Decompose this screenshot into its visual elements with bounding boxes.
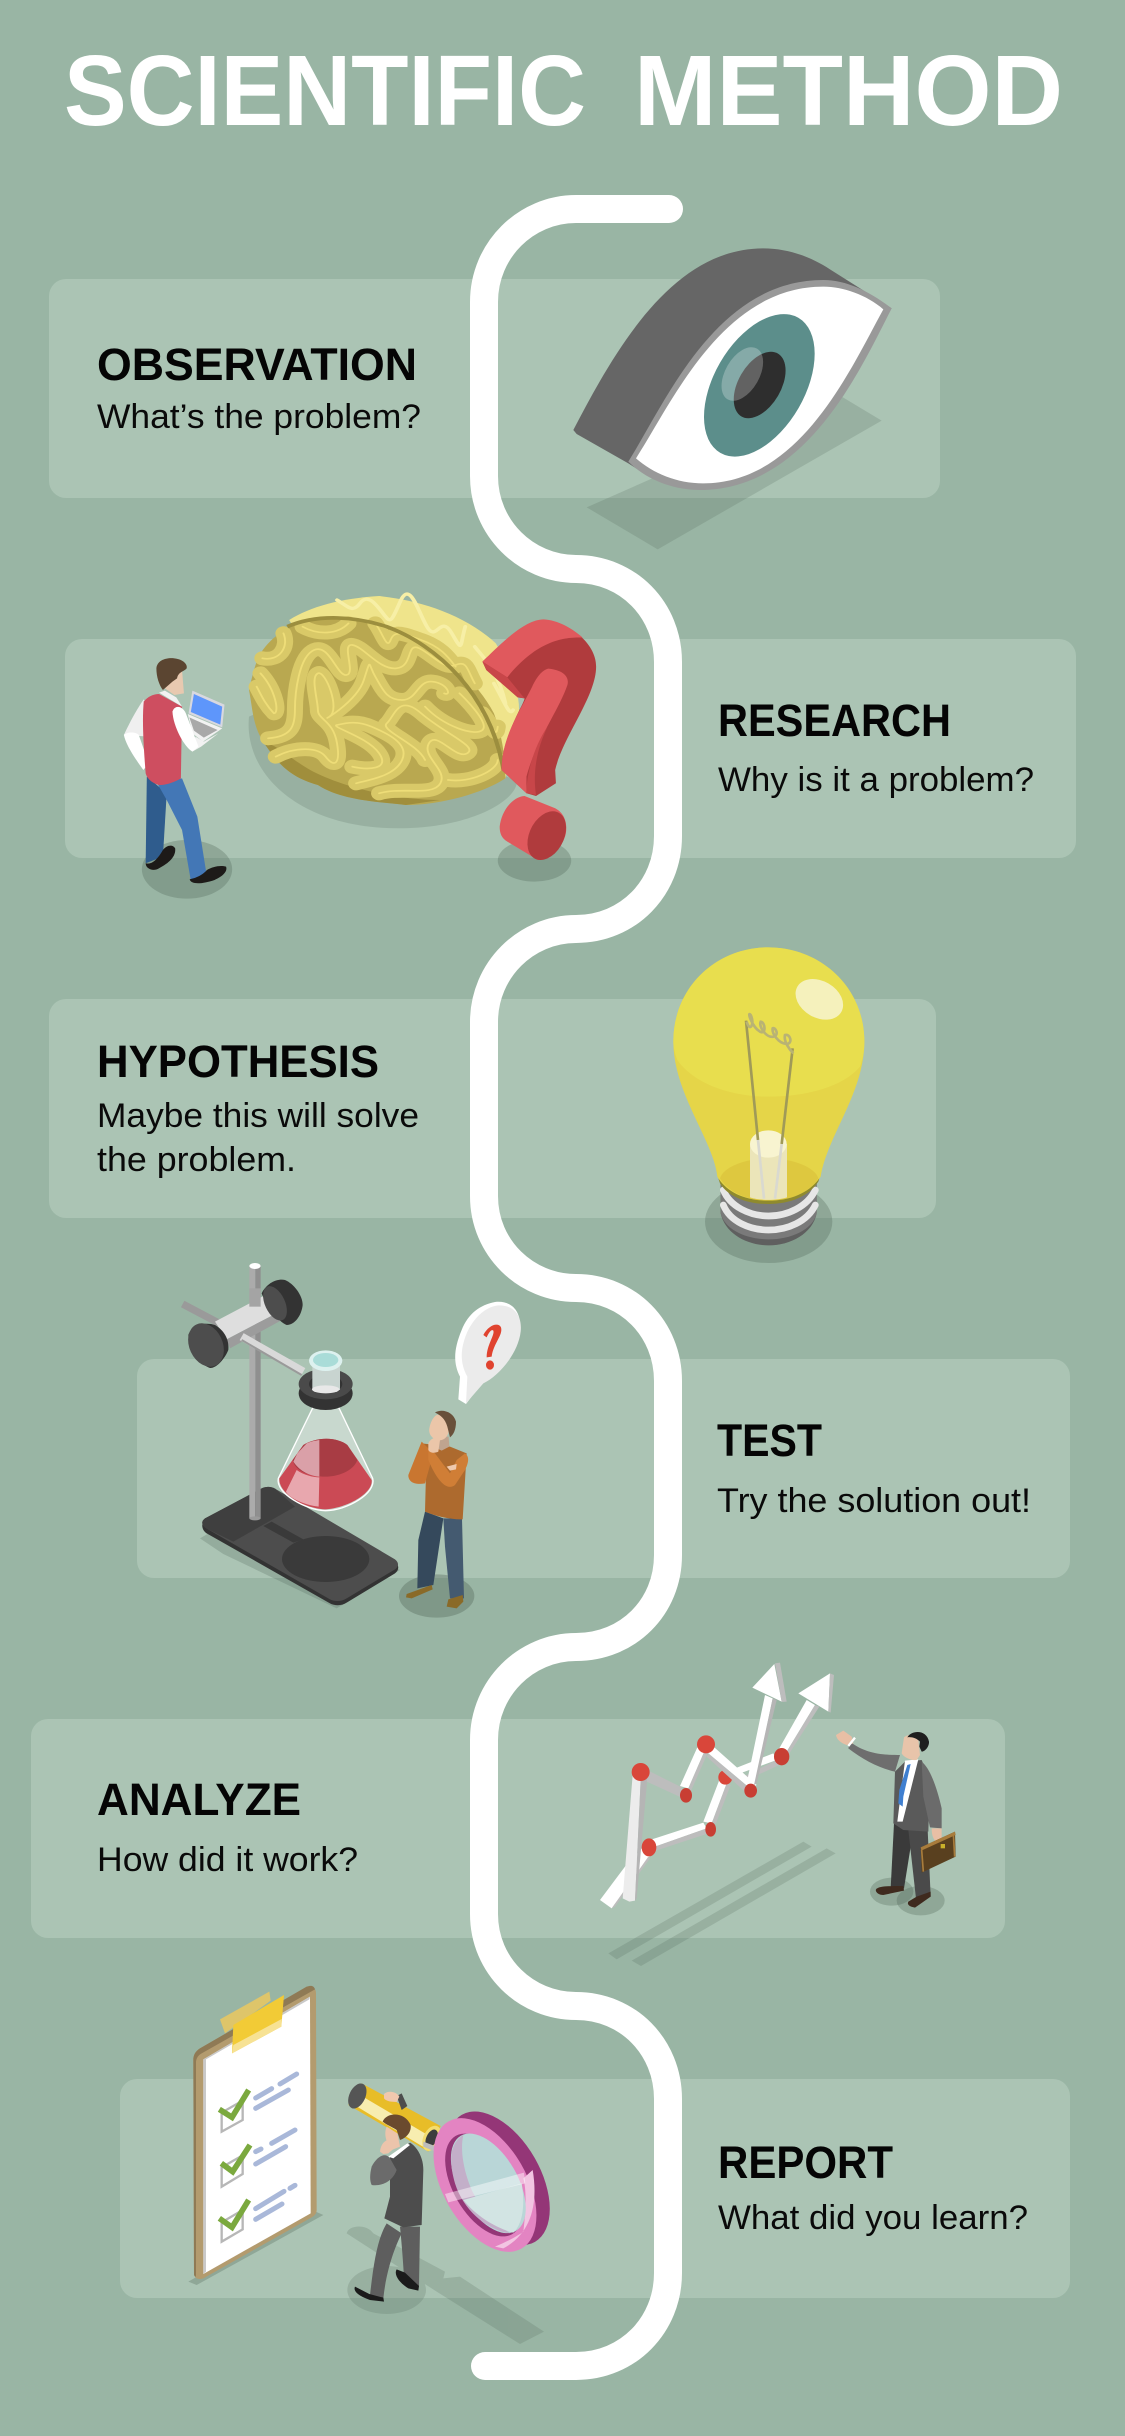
chart shadow (608, 1842, 836, 1966)
panel: analyze (31, 1719, 1005, 1938)
icon: brain with question mark and person (124, 594, 596, 899)
title: SCIENTIFIC (64, 35, 586, 147)
text: research question: Why is it a problem? (718, 761, 1034, 799)
text: analyze question: How did it work? (97, 1841, 358, 1879)
text: observation question: What’s the problem? (97, 398, 421, 436)
brain shadow (249, 703, 517, 828)
panel: hypothesis (49, 999, 936, 1218)
thinking person (399, 1411, 474, 1618)
text: report question: What did you learn? (718, 2199, 1028, 2237)
heading: research: RESEARCH (718, 695, 951, 746)
panel: test (137, 1359, 1070, 1578)
heading: hypothesis: HYPOTHESIS (97, 1036, 379, 1087)
panel: research (65, 639, 1076, 858)
icon: lab flask on stand with thinking person (181, 1263, 521, 1618)
rear arrow line (600, 1673, 834, 1908)
icon: clipboard checklist and person with magnifying glass (188, 1986, 571, 2344)
heading: analyze: ANALYZE (97, 1774, 301, 1825)
panel: report (120, 2079, 1070, 2298)
heading: report: REPORT (718, 2137, 893, 2188)
stand rod and clamp (181, 1263, 303, 1520)
text: hypothesis statement: the problem. (97, 1141, 296, 1179)
clipboard (188, 1986, 323, 2285)
title (64, 35, 1063, 147)
person and magnifier shadow (347, 2226, 544, 2344)
businessman (836, 1731, 956, 1915)
panel: observation (49, 279, 940, 498)
flask (278, 1350, 373, 1511)
icon: light bulb (673, 947, 864, 1263)
winding white path (484, 209, 669, 2366)
icon: rising arrows chart with businessman (600, 1663, 956, 1966)
icon: eye (573, 248, 892, 549)
heading: test: TEST (717, 1415, 822, 1466)
text: hypothesis statement: Maybe this will solve (97, 1097, 419, 1135)
person holding magnifier (355, 2092, 423, 2302)
magnifying glass (344, 2081, 571, 2269)
text: hypothesis statement (97, 1097, 419, 1179)
brain (249, 594, 519, 805)
title: METHOD (634, 35, 1063, 147)
text: test prompt: Try the solution out! (717, 1482, 1031, 1520)
big red question mark (482, 619, 596, 882)
speech bubble with question mark (455, 1302, 521, 1404)
person with laptop (124, 658, 232, 899)
lab stand base (200, 1487, 400, 1608)
checklist rows (219, 2074, 297, 2242)
front arrow line (623, 1663, 787, 1902)
heading: observation: OBSERVATION (97, 339, 417, 390)
